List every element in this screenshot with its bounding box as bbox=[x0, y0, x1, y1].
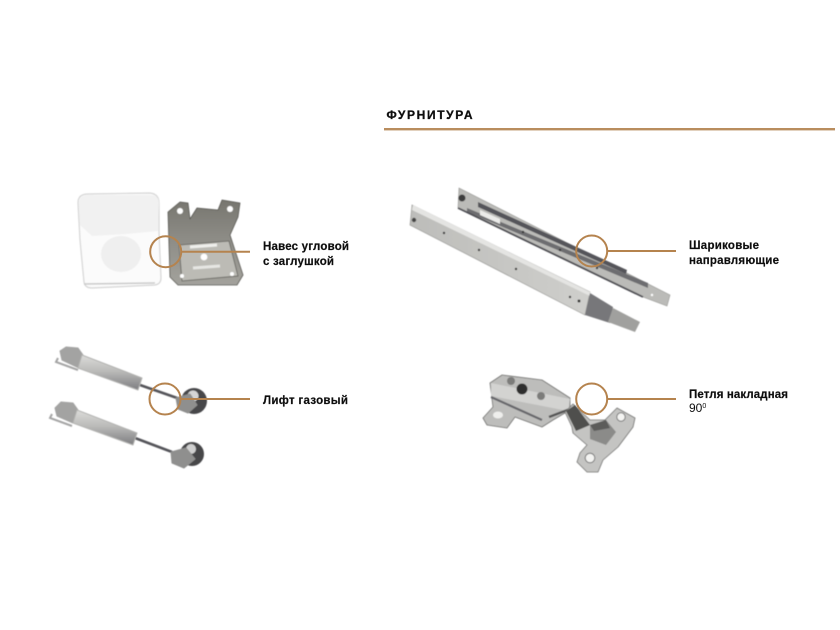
label: с заглушкой bbox=[263, 256, 334, 268]
callout line bbox=[607, 250, 676, 252]
product: corner hinge with cap bbox=[78, 193, 349, 288]
image: lower gas lift bbox=[50, 402, 204, 468]
image: hinge bbox=[483, 375, 635, 472]
callout circle bbox=[576, 384, 607, 414]
product: overlay hinge bbox=[483, 375, 788, 472]
image: metal bracket bbox=[168, 200, 243, 285]
callout circle bbox=[150, 236, 181, 267]
callout circle bbox=[150, 384, 180, 414]
callout line bbox=[180, 398, 250, 400]
callout line bbox=[607, 398, 676, 400]
heading: Фурнитура: ФУРНИТУРА bbox=[386, 108, 473, 122]
image: upper gas lift bbox=[56, 347, 207, 414]
product: ball bearing slides bbox=[410, 188, 779, 332]
callout line bbox=[181, 251, 250, 253]
label: Шариковые bbox=[689, 240, 759, 252]
image: lower rail bbox=[410, 205, 640, 332]
image: upper rail bbox=[458, 188, 670, 306]
label: Петля накладная bbox=[689, 389, 788, 401]
callout circle bbox=[576, 236, 607, 266]
label: Лифт газовый bbox=[263, 395, 348, 407]
label: направляющие bbox=[689, 255, 779, 267]
image: white plastic cap bbox=[78, 193, 161, 288]
label: 90 bbox=[689, 401, 703, 415]
label: Навес угловой bbox=[263, 241, 349, 253]
product: gas lift bbox=[50, 347, 348, 468]
heading rule bbox=[384, 128, 835, 130]
label: 0 bbox=[702, 403, 706, 410]
